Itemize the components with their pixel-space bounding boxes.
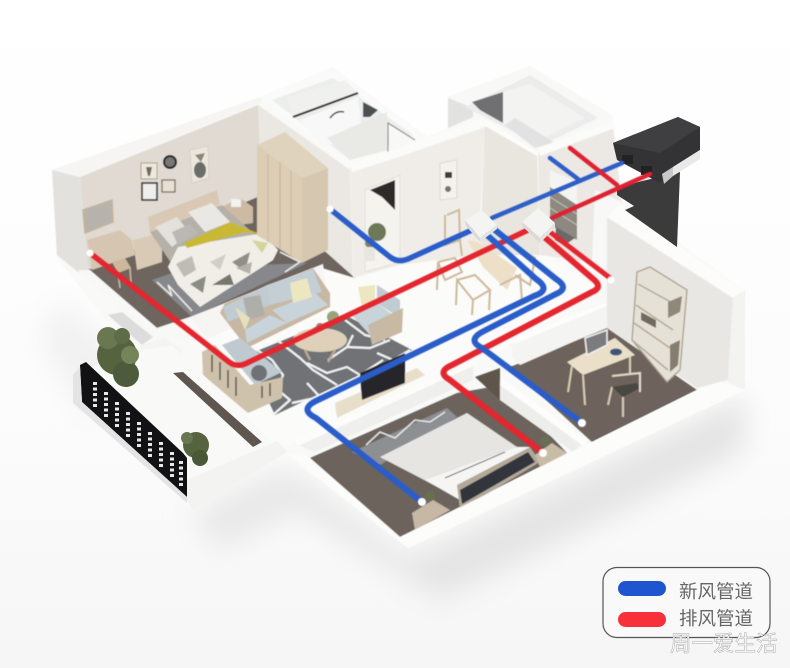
watermark: 周一爱生活: [670, 632, 778, 656]
bedroom rug: [152, 263, 307, 317]
sofa main: [220, 268, 330, 348]
mouse pad: [610, 348, 622, 356]
panel: dining set: [437, 210, 535, 315]
wall mirror: [83, 200, 113, 233]
outer band wall: [78, 270, 208, 340]
window: [363, 102, 378, 117]
TV: [360, 353, 405, 400]
red duct to study wall: [550, 232, 614, 284]
small plant: [181, 432, 209, 466]
building base: [52, 66, 745, 548]
panel: dining room walls: [350, 117, 540, 278]
bed: [150, 205, 255, 270]
desk: [567, 338, 635, 405]
blue duct to bedroom two: [307, 235, 544, 506]
dark floor strip: [173, 372, 262, 447]
bed two: [380, 413, 517, 497]
panel: living room: [202, 268, 425, 418]
gravel patch: [475, 368, 500, 400]
red duct to master bedroom: [86, 230, 528, 365]
balcony ledge: [187, 441, 287, 510]
railing: [73, 362, 187, 503]
panel: master bedroom: [52, 97, 355, 373]
legend label: fresh air duct: 新风管道: [679, 581, 753, 602]
ground shadow: [40, 300, 745, 600]
panel: kitchen wall: [538, 120, 622, 262]
front wall band: [285, 382, 745, 548]
panel: balcony room upper right: [447, 66, 612, 152]
unit shadow block: [617, 172, 680, 247]
blue duct to study: [474, 230, 586, 427]
dressing table: [87, 230, 135, 270]
shower rail: [293, 93, 358, 117]
legend label: exhaust duct: 排风管道: [679, 608, 753, 629]
armchair left: [202, 338, 283, 413]
wall pictures: [141, 146, 209, 200]
bedroom two rug: [352, 408, 457, 465]
computer monitor: [585, 330, 607, 355]
fresh air unit: [613, 117, 700, 247]
bookshelf: [632, 267, 687, 382]
coffee table: [293, 311, 347, 362]
inner partition: [327, 112, 388, 160]
blue duct to bathroom wall: [326, 206, 472, 261]
legend swatch: exhaust: [618, 612, 666, 627]
kitchen oven unit: [550, 170, 577, 205]
nightstands: [133, 235, 162, 270]
wardrobe: [257, 132, 328, 178]
pillows: [155, 217, 190, 247]
living floor: [190, 240, 600, 445]
unit body: [613, 117, 700, 183]
door: [365, 175, 400, 272]
legend: [603, 568, 770, 638]
carpet: [247, 315, 412, 415]
panel: bathroom: [260, 67, 427, 167]
blue duct to unit: [492, 158, 622, 218]
potted plant: [364, 223, 386, 261]
manifold left: [465, 210, 497, 242]
wall pier: [140, 338, 182, 373]
red duct to bedroom two: [443, 235, 598, 457]
potted tree: [97, 327, 139, 387]
wall picture: [440, 160, 457, 200]
armchair right: [350, 285, 403, 345]
TV console: [335, 368, 425, 418]
panel: bedroom two: [285, 361, 745, 548]
panel: study: [510, 190, 745, 442]
legend swatch: fresh air: [618, 581, 666, 596]
low divider wall: [190, 264, 326, 340]
chair: [608, 373, 640, 417]
shower head: [330, 112, 344, 118]
panel: balcony: [73, 327, 287, 510]
side table and plant: [412, 500, 450, 530]
manifold right: [522, 208, 555, 243]
red ducts to unit: [552, 148, 650, 218]
headboard: [148, 190, 220, 232]
partition wall: [500, 380, 583, 452]
